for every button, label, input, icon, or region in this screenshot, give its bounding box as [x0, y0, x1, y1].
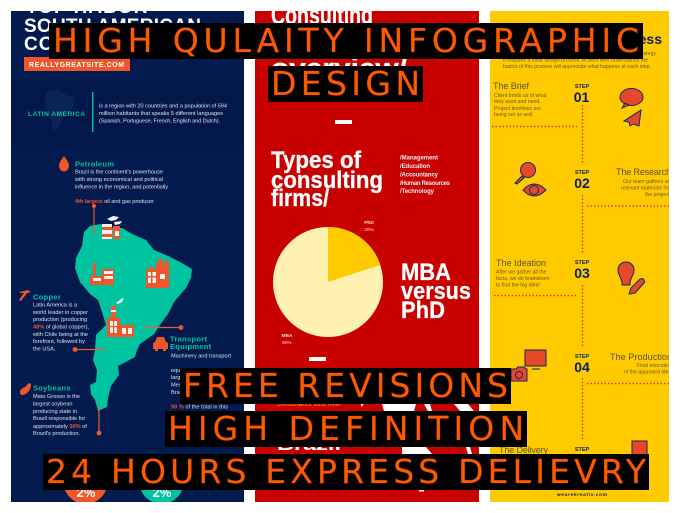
callout: petroleum: influence in the region, and potentially	[75, 184, 168, 190]
pie label: MBA	[282, 334, 292, 344]
pie label: MBA: 80%	[282, 340, 293, 346]
stat circle: orange 2%	[65, 490, 106, 502]
factory: northwest	[90, 263, 114, 285]
stat circle: teal 2%	[141, 490, 182, 502]
callout: petroleum: 4th largest oil and gas producer	[75, 199, 154, 205]
step 01: the brief: they want and need.	[494, 99, 541, 105]
factory: central	[107, 298, 134, 337]
step 02: the research: The Research	[616, 167, 671, 177]
step 02: the research: relevant materials for	[621, 186, 670, 192]
step 03: the ideation: After we gather all the	[496, 270, 547, 276]
callout: copper: 48% of global copper),	[33, 324, 89, 330]
step 02: the research: the project	[645, 192, 670, 198]
footer url: wearekreativ.com	[556, 492, 607, 498]
list of firm types: /Management	[400, 156, 438, 162]
heading: MBA versus PhD: PhD	[401, 297, 445, 324]
callout: copper: production (producing	[33, 317, 87, 323]
list of firm types	[400, 156, 451, 195]
step 01: the brief: 01	[574, 89, 589, 105]
step 03: the ideation: The Ideation	[496, 258, 546, 268]
callout: copper: Copper	[33, 292, 61, 302]
callout: copper: forefront, followed by	[33, 339, 85, 345]
intro: Latin America: LATIN AMERICA	[28, 111, 85, 118]
heading and intro: It requires a clear design process. A client who understands the	[503, 58, 648, 64]
callout: soybeans: Mato Grosso is the	[33, 394, 80, 400]
step 04: the production: of the approved idea	[624, 370, 671, 376]
step 01: the brief: STEP	[575, 84, 590, 90]
heading fragment: Brazil: Brazil	[277, 435, 341, 454]
step 01: the brief: being set as well.	[494, 112, 534, 118]
icon: speech bubble and paper plane	[620, 88, 643, 126]
callout: transport equipment: Transport	[170, 334, 207, 344]
callout: copper: with Chile being at the	[32, 332, 88, 338]
callout: transport equipment	[153, 334, 231, 410]
step 03: the ideation	[494, 258, 590, 348]
heading: types of consulting firms: Types of	[271, 147, 362, 174]
intro: Latin America	[28, 89, 227, 132]
banner: high quality infographic: HIGH QULAITY INFOGRAPHIC	[53, 21, 639, 60]
pie chart	[273, 227, 383, 337]
panel: consulting overview	[255, 0, 479, 502]
step 03: the ideation: facts, we do brainstorm	[496, 276, 550, 282]
intro: Latin America: is a region with 20 countries and a population of 594	[99, 104, 227, 110]
divider dash bottom	[309, 357, 326, 361]
callout: soybeans: largest soybean	[33, 402, 72, 408]
callout: transport equipment: larg	[171, 375, 180, 381]
step 04: the production: Final execution	[637, 363, 672, 369]
list of firm types: /Human Resources	[400, 181, 451, 187]
heading: MBA versus PhD: versus	[401, 278, 471, 305]
icon: magnifier and eye	[515, 162, 546, 196]
callout: copper: the USA.	[33, 346, 56, 352]
panel: design process	[490, 11, 672, 502]
step 04: the production	[574, 352, 672, 441]
small mark near bottom	[419, 490, 424, 492]
pie label: MBA: MBA	[282, 333, 293, 339]
heading: South American countries: SOUTH AMERICAN	[24, 16, 202, 37]
divider dash top	[335, 120, 352, 124]
heading: South American countries: COUNTRIES	[24, 34, 145, 55]
step 01: the brief	[492, 81, 590, 163]
list of firm types: /Accountancy	[400, 172, 439, 178]
website badge: REALLYGREATSITE.COM	[29, 62, 124, 69]
world map fragments	[361, 404, 474, 454]
panel: South America infographic	[11, 0, 244, 504]
step 01: the brief: Project timelines are	[494, 106, 541, 112]
banner: design: DESIGN	[271, 64, 420, 103]
callout: copper	[19, 290, 89, 352]
heading: South American countries	[24, 11, 200, 50]
heading: consulting overview	[272, 11, 407, 66]
callout: petroleum	[59, 156, 168, 205]
pointer lines	[73, 204, 183, 435]
pie label: PhD: PhD	[364, 220, 374, 226]
step 02: the research	[574, 167, 671, 253]
callout: transport equipment: Bra	[171, 390, 181, 396]
callout: transport equipment: Mex	[171, 382, 182, 388]
callout: copper: world leader in copper	[32, 310, 88, 316]
icon: documents	[632, 441, 647, 455]
callout: petroleum: Petroleum	[75, 160, 114, 168]
heading and intro	[503, 36, 662, 69]
step 04: the production: 04	[574, 359, 590, 375]
intro: Latin America: million habitants that speaks 5 different languages	[99, 111, 223, 117]
step 04: the production: STEP	[575, 354, 590, 360]
stat circle: teal 2%: 2%	[153, 485, 172, 500]
step 02: the research: Our team gathers all	[623, 179, 670, 185]
step 03: the ideation: STEP	[575, 260, 590, 266]
step 05: the delivery: STEP	[575, 447, 590, 453]
callout: transport equipment: equ	[171, 368, 180, 374]
map of South America	[75, 224, 192, 411]
step 02: the research: STEP	[575, 170, 590, 176]
callout: transport equipment: Equipment	[170, 342, 212, 351]
heading: consulting overview: Consulting	[271, 0, 373, 30]
icon: light bulb and pencil	[618, 262, 644, 294]
step 01: the brief: The Brief	[493, 81, 529, 91]
callout: transport equipment: 90 % of the total in this	[171, 404, 228, 410]
step 05: the delivery	[499, 445, 590, 455]
intro: Latin America: (Spanish, Portuguese, French, English and Dutch).	[99, 118, 220, 124]
callout: transport equipment: Machinery and transport	[171, 354, 231, 360]
heading and intro: Our Process	[579, 31, 662, 47]
callout: soybeans: producing state in	[33, 409, 77, 415]
callout: soybeans: Brazil responsible for	[33, 416, 85, 422]
callout: soybeans	[20, 383, 87, 437]
heading: types of consulting firms: consulting	[271, 167, 383, 194]
list of firm types: /Technology	[400, 189, 435, 195]
step 03: the ideation: 03	[574, 265, 590, 281]
step 03: the ideation: to find the big idea!	[496, 282, 540, 288]
step 05: the delivery: The Delivery	[499, 445, 548, 455]
step 02: the research: 02	[574, 175, 590, 191]
heading: types of consulting firms: firms/	[271, 185, 329, 212]
heading: types of consulting firms	[271, 150, 382, 207]
stat circle: orange 2%: 2%	[77, 485, 96, 500]
callout: soybeans: Brazil's production.	[33, 431, 81, 437]
banner: high definition: HIGH DEFINITION	[168, 409, 524, 448]
pie label: PhD: 20%	[364, 227, 375, 233]
heading: consulting overview: overview/	[271, 53, 408, 83]
banner: free revisions: FREE REVISIONS	[183, 366, 508, 405]
partial text between banners: consultants sold over	[277, 402, 341, 408]
heading: MBA versus PhD	[400, 263, 470, 318]
callout: soybeans: Soybeans	[33, 384, 71, 392]
icon: monitor and camera	[511, 350, 546, 381]
banner: 24 hours express delivery: 24 HOURS EXPRESS DELIEVRY	[46, 452, 647, 491]
website badge	[24, 57, 130, 71]
heading and intro: basics of this process will appreciate what happens at each step.	[503, 64, 651, 70]
factory: northeast	[146, 259, 169, 288]
heading: MBA versus PhD: MBA	[401, 259, 451, 286]
callout: copper: Latin America is a	[33, 302, 78, 308]
list of firm types: /Education	[400, 164, 430, 170]
pie label: PhD	[364, 220, 374, 231]
callout: petroleum: with strong economical and political	[74, 177, 163, 183]
step 04: the production: The Production	[610, 352, 672, 362]
factory: north	[102, 216, 122, 239]
step 01: the brief: Client briefs us of what	[494, 93, 547, 99]
heading and intro: strategy.	[637, 51, 657, 57]
callout: soybeans: approximately 30% of	[33, 424, 87, 430]
callout: petroleum: Brazil is the continent's powerhouse	[75, 170, 163, 176]
